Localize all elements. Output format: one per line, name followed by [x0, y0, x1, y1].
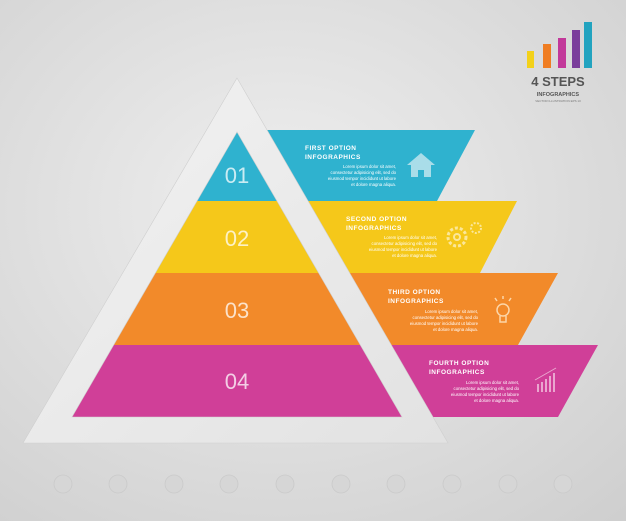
band 2 yellow: Lorem ipsum dolor sit amet, — [384, 235, 437, 240]
bottom icon row — [54, 475, 572, 493]
band 1 teal: FIRST OPTION — [305, 145, 356, 152]
band 1 teal: eiusmod tempor incididunt ut labore — [328, 176, 397, 181]
band 3 orange: et dolore magna aliqua. — [433, 327, 478, 332]
logo: 4 steps: INFOGRAPHICS — [537, 92, 579, 98]
icon: growth chart — [535, 368, 556, 392]
band 4 pink: Lorem ipsum dolor sit amet, — [466, 380, 519, 385]
icon: house — [407, 153, 435, 177]
band 3 orange: eiusmod tempor incididunt ut labore — [410, 321, 479, 326]
band 1 teal: 01 — [225, 163, 249, 188]
band 3 orange: INFOGRAPHICS — [388, 298, 444, 305]
band 2 yellow: 02 — [225, 226, 249, 251]
band 4 pink: INFOGRAPHICS — [429, 369, 485, 376]
band 4 pink: 04 — [225, 369, 249, 394]
band 3 orange: 03 — [225, 298, 249, 323]
band 1 teal: et dolore magna aliqua. — [351, 182, 396, 187]
band 2 yellow: eiusmod tempor incididunt ut labore — [369, 247, 438, 252]
band 3 orange — [112, 273, 558, 345]
pyramid white frame — [23, 78, 448, 443]
band 2 yellow: INFOGRAPHICS — [346, 225, 402, 232]
band 4 pink: eiusmod tempor incididunt ut labore — [451, 392, 520, 397]
logo: 4 steps — [527, 22, 592, 103]
band 2 yellow — [153, 201, 517, 273]
band 2 yellow: consectetur adipisicing elit, sed do — [372, 241, 438, 246]
band 3 orange: THIRD OPTION — [388, 289, 441, 296]
band 1 teal: consectetur adipisicing elit, sed do — [331, 170, 397, 175]
band 3 orange: consectetur adipisicing elit, sed do — [413, 315, 479, 320]
band 4 pink: consectetur adipisicing elit, sed do — [454, 386, 520, 391]
band 4 pink: FOURTH OPTION — [429, 360, 489, 367]
band 3 orange: Lorem ipsum dolor sit amet, — [425, 309, 478, 314]
icon: bulb — [495, 296, 511, 322]
band 4 pink: et dolore magna aliqua. — [474, 398, 519, 403]
band 1 teal: INFOGRAPHICS — [305, 154, 361, 161]
logo: 4 steps: 4 STEPS — [531, 74, 585, 89]
band 2 yellow: et dolore magna aliqua. — [392, 253, 437, 258]
band 2 yellow: SECOND OPTION — [346, 216, 407, 223]
band 4 pink — [72, 345, 598, 417]
logo: 4 steps: VECTOR ILLUSTRATION EPS 10 — [535, 99, 581, 103]
band 1 teal — [196, 130, 475, 201]
icon: gears — [448, 223, 481, 246]
band 1 teal: Lorem ipsum dolor sit amet, — [343, 164, 396, 169]
